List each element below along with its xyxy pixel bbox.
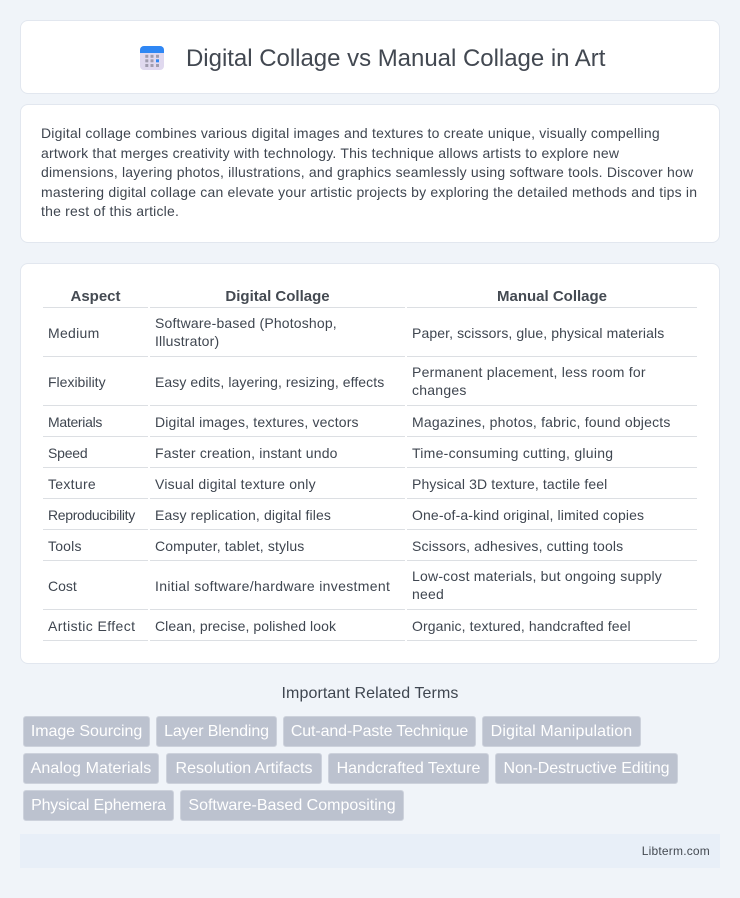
comparison table: Software-based (Photoshop, xyxy=(155,315,337,331)
title: Digital Collage vs Manual Collage in Art xyxy=(186,45,605,72)
comparison table: Clean, precise, polished look xyxy=(155,618,336,634)
related terms heading: Important Related Terms xyxy=(282,685,458,702)
related terms tags xyxy=(23,716,678,821)
related terms tags: Software-Based Compositing xyxy=(188,797,396,814)
comparison table: need xyxy=(412,586,444,602)
comparison table: Reproducibility xyxy=(48,507,135,523)
comparison table: Manual Collage xyxy=(497,288,607,305)
comparison table: One-of-a-kind original, limited copies xyxy=(412,507,644,523)
comparison table: Low-cost materials, but ongoing supply xyxy=(412,568,662,584)
comparison table: Faster creation, instant undo xyxy=(155,445,338,461)
comparison table: Digital images, textures, vectors xyxy=(155,414,359,430)
related terms tags: Image Sourcing xyxy=(31,723,142,740)
intro text: mastering digital collage can elevate your artistic projects by exploring the detailed methods and tips in xyxy=(41,184,697,200)
comparison table: Medium xyxy=(48,325,100,341)
intro text: Digital collage combines various digital images and textures to create unique, visually compelling xyxy=(41,125,660,141)
related terms tags: Analog Materials xyxy=(31,760,151,777)
related terms tags: Digital Manipulation xyxy=(491,723,632,740)
header card xyxy=(20,20,720,94)
comparison table: Computer, tablet, stylus xyxy=(155,538,304,554)
footer source: Libterm.com xyxy=(642,844,710,858)
intro card xyxy=(20,104,720,243)
comparison table: Magazines, photos, fabric, found objects xyxy=(412,414,671,430)
comparison table: Easy replication, digital files xyxy=(155,507,331,523)
comparison table: Materials xyxy=(48,414,102,430)
related terms tags: Cut-and-Paste Technique xyxy=(291,723,468,740)
comparison table: Visual digital texture only xyxy=(155,476,316,492)
comparison table: Scissors, adhesives, cutting tools xyxy=(412,538,623,554)
related terms tags: Resolution Artifacts xyxy=(176,760,312,777)
comparison table: Easy edits, layering, resizing, effects xyxy=(155,374,384,390)
icon: calendar grid xyxy=(140,46,164,70)
intro text: artwork that merges creativity with technology. This technique allows artists to explore new xyxy=(41,145,619,161)
intro text xyxy=(41,125,697,219)
comparison table: Artistic Effect xyxy=(48,618,135,634)
comparison table: Cost xyxy=(48,578,77,594)
comparison table: Digital Collage xyxy=(225,288,330,305)
comparison table: Paper, scissors, glue, physical materials xyxy=(412,325,664,341)
comparison table: Permanent placement, less room for xyxy=(412,364,646,380)
intro text: dimensions, layering photos, illustrations, and graphics seamlessly using software tools. Discover how xyxy=(41,164,693,180)
related terms tags: Physical Ephemera xyxy=(31,797,166,814)
comparison table: Illustrator) xyxy=(155,333,219,349)
related terms tags: Layer Blending xyxy=(164,723,269,740)
comparison table: Tools xyxy=(48,538,82,554)
comparison table: Time-consuming cutting, gluing xyxy=(412,445,613,461)
intro text: the rest of this article. xyxy=(41,203,179,219)
comparison table: Organic, textured, handcrafted feel xyxy=(412,618,631,634)
comparison table: Physical 3D texture, tactile feel xyxy=(412,476,607,492)
related terms tags: Handcrafted Texture xyxy=(337,760,480,777)
comparison table: Texture xyxy=(48,476,96,492)
related terms tags: Non-Destructive Editing xyxy=(503,760,670,777)
comparison table: Flexibility xyxy=(48,374,106,390)
comparison table xyxy=(43,288,697,641)
comparison table card xyxy=(20,263,720,664)
comparison table: Speed xyxy=(48,445,87,461)
comparison table: Initial software/hardware investment xyxy=(155,578,390,594)
footer bar xyxy=(20,834,720,868)
comparison table: changes xyxy=(412,382,467,398)
comparison table: Aspect xyxy=(70,288,121,305)
